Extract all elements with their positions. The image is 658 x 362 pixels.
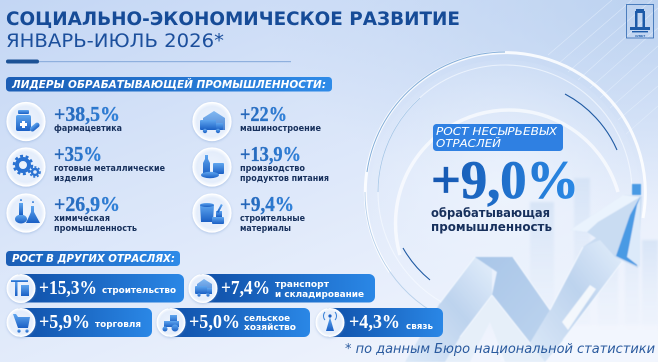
icon: tractor xyxy=(162,315,179,332)
icon: food products xyxy=(201,155,224,178)
bar: agriculture: хозяйство xyxy=(244,323,296,333)
glass arrow xyxy=(405,184,642,362)
leader: pharmaceuticals: фармацевтика xyxy=(54,124,122,134)
leader: food production: производство xyxy=(240,164,305,174)
leader: pharmaceuticals: +38,5% xyxy=(54,102,120,126)
title rule xyxy=(6,60,291,64)
leader: metal products: готовые металлические xyxy=(54,164,165,174)
icon: pill bottle xyxy=(16,110,41,133)
leader: food production xyxy=(193,142,329,186)
bar: transport xyxy=(189,274,375,302)
bar: transport: и складирование xyxy=(275,290,364,300)
bar: trade: торговля xyxy=(95,320,141,330)
icon: shopping cart xyxy=(13,314,30,333)
bar: construction: +15,3% xyxy=(39,277,97,299)
bar: agriculture: сельское xyxy=(244,314,290,324)
leader: chemical industry xyxy=(7,192,137,234)
bar: construction xyxy=(7,274,184,302)
main figure label: промышленность xyxy=(431,219,552,234)
title xyxy=(6,8,460,52)
skyline xyxy=(500,178,658,362)
badge: non-resource growth xyxy=(433,124,563,151)
logo xyxy=(626,4,654,38)
leader: metal products: +35% xyxy=(54,142,102,166)
badge: non-resource growth: РОСТ НЕСЫРЬЕВЫХ xyxy=(436,125,558,138)
bar: trade xyxy=(7,308,152,337)
bar: transport: транспорт xyxy=(275,280,330,290)
bar: construction: строительство xyxy=(102,286,176,296)
main figure label: обрабатывающая xyxy=(431,205,550,220)
icon: truck and warehouse xyxy=(200,111,225,133)
bar: agriculture: +5,0% xyxy=(189,311,240,333)
leader: machinery: машиностроение xyxy=(240,124,321,134)
heading: other sectors: РОСТ В ДРУГИХ ОТРАСЛЯХ: xyxy=(12,252,175,265)
icon: truck and warehouse xyxy=(195,279,212,297)
leader: machinery: +22% xyxy=(240,102,287,126)
leader: chemical industry: +26,9% xyxy=(54,192,120,216)
leader: food production: продуктов питания xyxy=(240,174,329,184)
title: СОЦИАЛЬНО-ЭКОНОМИЧЕСКОЕ РАЗВИТИЕ xyxy=(6,8,460,30)
icon: crane xyxy=(11,280,29,296)
bar: transport: +7,4% xyxy=(221,277,270,299)
heading: leaders: ЛИДЕРЫ ОБРАБАТЫВАЮЩЕЙ ПРОМЫШЛЕННОСТИ: xyxy=(11,78,326,91)
leader: metal products: изделия xyxy=(54,174,93,184)
bar: communications: +4,3% xyxy=(349,311,400,333)
icon: radio tower xyxy=(323,312,337,331)
leader: machinery xyxy=(193,102,321,140)
main figure label xyxy=(431,205,552,234)
leader: construction materials: +9,4% xyxy=(240,192,294,216)
leader: pharmaceuticals xyxy=(7,102,122,140)
logo: UZMET xyxy=(635,34,645,38)
leader: chemical industry: промышленность xyxy=(54,224,137,234)
title: ЯНВАРЬ-ИЮЛЬ 2026* xyxy=(6,30,224,52)
bar: trade: +5,9% xyxy=(39,311,90,333)
leader: metal products xyxy=(7,142,165,186)
glass rings xyxy=(365,52,645,319)
leader: food production: +13,9% xyxy=(240,142,301,166)
footnote: * по данным Бюро национальной статистики xyxy=(345,342,655,357)
leader: construction materials: материалы xyxy=(240,224,291,234)
bar: communications xyxy=(316,308,443,337)
badge: non-resource growth: ОТРАСЛЕЙ xyxy=(436,137,501,150)
leader: chemical industry: химическая xyxy=(54,214,110,224)
main figure: +9,0% xyxy=(431,150,579,210)
bar: communications: связь xyxy=(406,322,433,332)
icon: flasks xyxy=(15,199,40,224)
icon: paint bucket and bricks xyxy=(200,203,224,224)
bar: agriculture xyxy=(157,308,310,337)
leader: construction materials xyxy=(193,192,305,234)
leader: construction materials: строительные xyxy=(240,214,305,224)
icon: gears xyxy=(14,156,40,177)
